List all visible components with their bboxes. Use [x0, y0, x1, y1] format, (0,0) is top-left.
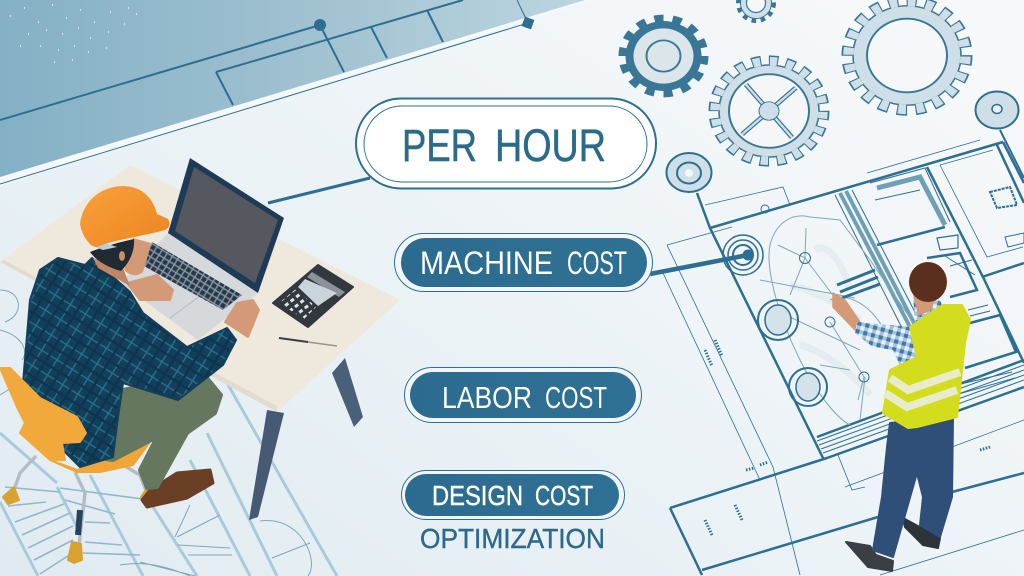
label: LABOR — [442, 380, 532, 415]
connector: per hour to desk — [268, 178, 370, 203]
pen — [279, 338, 337, 346]
desk back leg — [332, 358, 363, 427]
top-left blueprint band — [0, 0, 592, 186]
machine outline — [769, 216, 915, 425]
keyboard — [142, 242, 242, 310]
machine rollers — [837, 270, 880, 298]
laptop base — [120, 233, 258, 340]
left hand — [127, 275, 173, 300]
machine smudges — [790, 248, 870, 395]
standing worker — [833, 262, 970, 571]
main walls — [670, 142, 1024, 575]
seated worker and chair — [0, 186, 259, 563]
shirt — [23, 258, 236, 467]
label: COST — [567, 245, 627, 281]
desk front leg — [249, 410, 284, 520]
title text: HOUR — [495, 120, 606, 171]
sleeve — [855, 322, 918, 373]
label: MACHINE — [420, 245, 553, 281]
hair — [90, 239, 134, 271]
knob: center — [666, 153, 712, 228]
trousers — [100, 378, 221, 488]
gear: spoked — [714, 61, 824, 161]
blueprint plan — [663, 140, 1024, 575]
desk — [0, 165, 400, 520]
vest stripes — [885, 372, 960, 407]
connector: machine cost to plan — [650, 250, 754, 274]
knob: right — [976, 92, 1024, 178]
chair seat — [50, 442, 150, 472]
title text — [402, 120, 606, 171]
laptop screen — [168, 158, 284, 293]
neck and collar — [913, 293, 945, 325]
pill: per hour — [356, 98, 656, 188]
shoe — [142, 470, 213, 507]
rings — [723, 235, 763, 275]
hatched band — [817, 365, 1024, 453]
pill: machine cost — [394, 234, 652, 292]
label: COST — [545, 380, 607, 415]
far shoe — [903, 518, 940, 548]
title text: PER — [402, 120, 477, 171]
upper details — [990, 187, 1017, 208]
label: COST — [535, 480, 593, 511]
chair back — [0, 368, 86, 460]
hair — [909, 262, 947, 302]
laptop — [120, 158, 284, 340]
hi-vis vest — [883, 305, 970, 428]
optimization label: OPTIMIZATION — [420, 523, 605, 554]
chair feet — [3, 487, 154, 563]
pill: design cost — [402, 470, 624, 520]
helmet liner — [87, 237, 117, 250]
calculator — [273, 265, 353, 327]
label — [442, 380, 607, 415]
forearm and hand — [833, 293, 860, 330]
label — [432, 480, 593, 511]
hard hat — [80, 186, 169, 247]
gear: dark — [622, 18, 704, 94]
neck — [93, 258, 130, 286]
near shoe — [846, 542, 893, 571]
dimension lines — [663, 140, 1024, 575]
thick column — [840, 191, 915, 327]
trousers — [873, 417, 953, 557]
gear: large — [848, 1, 966, 110]
head — [124, 238, 151, 275]
pill: labor cost — [404, 368, 642, 422]
label: DESIGN — [432, 480, 523, 511]
ear — [119, 251, 125, 261]
floor blueprint lines — [0, 290, 337, 576]
gear: small top — [738, 0, 774, 20]
right hand — [225, 300, 259, 337]
desk top — [0, 165, 400, 412]
chair legs — [14, 456, 147, 545]
